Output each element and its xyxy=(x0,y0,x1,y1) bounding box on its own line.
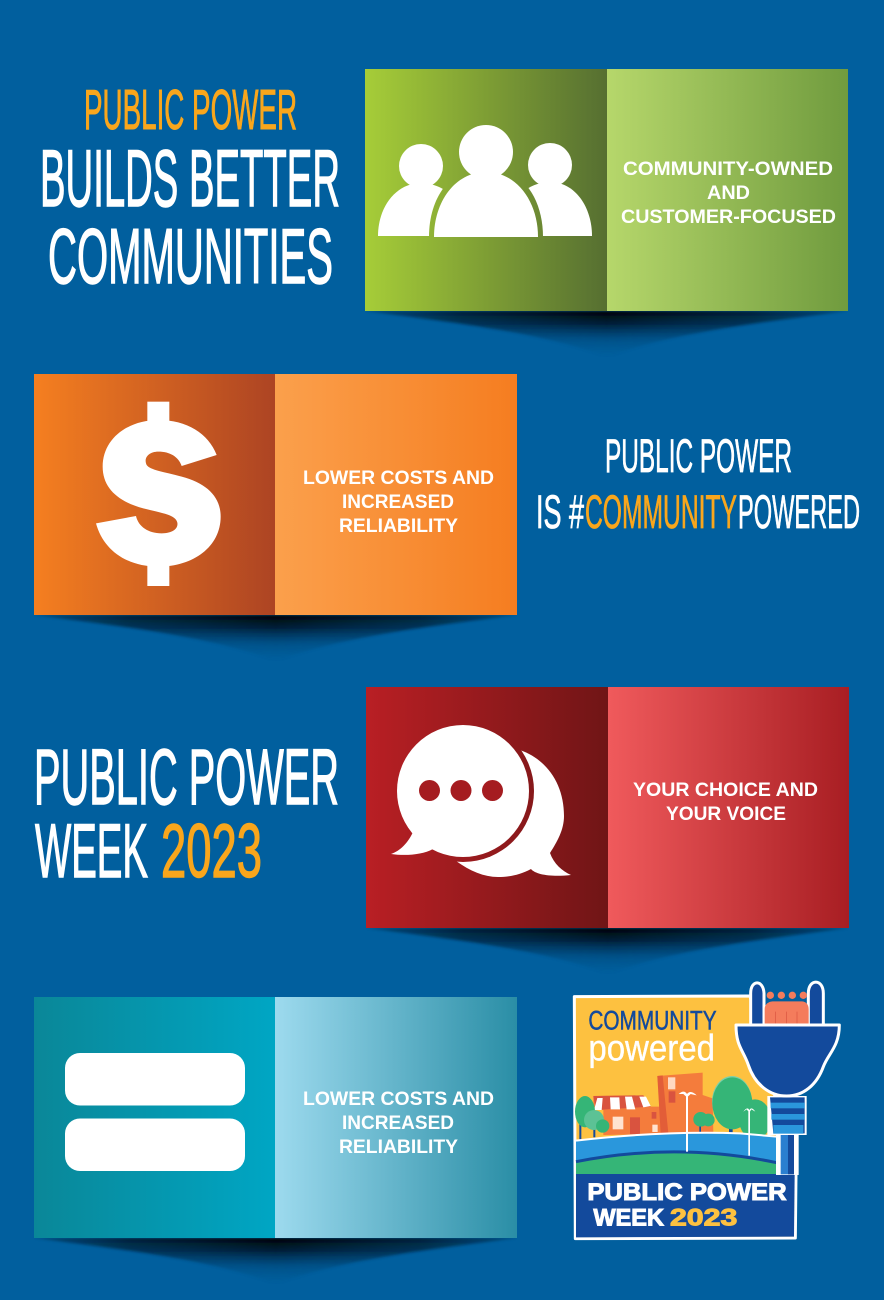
heading: public power is #communitypowered: IS # xyxy=(536,485,584,538)
panel shadow: red xyxy=(366,928,849,974)
panel left: orange xyxy=(34,374,275,615)
heading: public power week 2023: WEEK xyxy=(35,809,148,894)
panel right: teal xyxy=(275,997,517,1238)
icon: dollar sign xyxy=(96,402,221,586)
panel text: lower costs and increased reliability: INCREASED xyxy=(342,1112,454,1134)
heading: public power builds better communities xyxy=(40,78,340,300)
panel shadow: teal xyxy=(34,1238,517,1284)
heading: public power week 2023: PUBLIC POWER xyxy=(34,732,339,821)
panel left: red xyxy=(366,687,608,928)
logo: blue title band xyxy=(576,1174,795,1237)
panel left: teal xyxy=(34,997,275,1238)
panel right: green xyxy=(607,69,848,311)
panel text: lower costs and increased reliability xyxy=(303,1088,494,1158)
panel left: green xyxy=(365,69,607,311)
panel: lower costs (teal) xyxy=(34,997,517,1284)
logo text: community powered: COMMUNITY xyxy=(588,1005,717,1035)
heading: public power is #communitypowered xyxy=(536,429,860,538)
heading: public power is #communitypowered: COMMUNITY xyxy=(585,485,737,538)
panel text: your choice and your voice: YOUR CHOICE AND xyxy=(633,779,818,801)
logo text: community powered xyxy=(588,1005,717,1069)
panel text: community-owned and customer-focused: AND xyxy=(707,182,750,204)
panel: your choice (red) xyxy=(366,687,849,974)
heading: public power builds better communities: COMMUNITIES xyxy=(48,212,333,300)
logo text: public power week 2023 xyxy=(587,1180,787,1231)
heading: public power builds better communities: PUBLIC POWER xyxy=(84,78,297,142)
panel: community-owned xyxy=(365,69,848,357)
logo: water and hill xyxy=(576,1133,777,1175)
heading: public power week 2023 xyxy=(34,732,339,894)
panel text: lower costs and increased reliability: INCREASED xyxy=(342,491,454,513)
panel text: community-owned and customer-focused xyxy=(621,158,836,228)
logo text: public power week 2023: WEEK xyxy=(593,1205,664,1231)
icon: three people xyxy=(378,125,592,242)
panel right: orange xyxy=(275,374,517,615)
panel text: lower costs and increased reliability: LOWER COSTS AND xyxy=(303,1088,494,1110)
panel text: lower costs and increased reliability: RELIABILITY xyxy=(339,1136,458,1158)
panel text: your choice and your voice: YOUR VOICE xyxy=(666,803,786,825)
panel text: lower costs and increased reliability xyxy=(303,467,494,537)
panel right: red xyxy=(608,687,849,928)
panel shadow: green xyxy=(365,311,848,357)
logo text: public power week 2023: PUBLIC POWER xyxy=(587,1180,787,1206)
logo text: public power week 2023: 2023 xyxy=(670,1205,737,1231)
panel text: community-owned and customer-focused: CUSTOMER-FOCUSED xyxy=(621,206,836,228)
panel: lower costs (orange) xyxy=(34,374,517,661)
infographic canvas: BUILDS BETTER xyxy=(40,134,340,224)
panel text: lower costs and increased reliability: RELIABILITY xyxy=(339,515,458,537)
logo: street lamps xyxy=(679,1092,755,1156)
logo: buildings xyxy=(593,1073,713,1135)
panel text: lower costs and increased reliability: LOWER COSTS AND xyxy=(303,467,494,489)
heading: public power week 2023: 2023 xyxy=(161,809,262,894)
icon: equals sign xyxy=(65,1053,245,1171)
logo: plug xyxy=(736,982,839,1175)
panel shadow: orange xyxy=(34,615,517,661)
logo: community powered public power week 2023 xyxy=(574,982,839,1239)
logo yellow panel xyxy=(574,996,796,1239)
logo text: community powered: powered xyxy=(588,1028,715,1069)
icon: chat bubbles xyxy=(391,720,571,877)
panel text: community-owned and customer-focused: COMMUNITY-OWNED xyxy=(623,158,833,180)
logo: trees xyxy=(575,1076,771,1157)
panel text: your choice and your voice xyxy=(633,779,818,825)
